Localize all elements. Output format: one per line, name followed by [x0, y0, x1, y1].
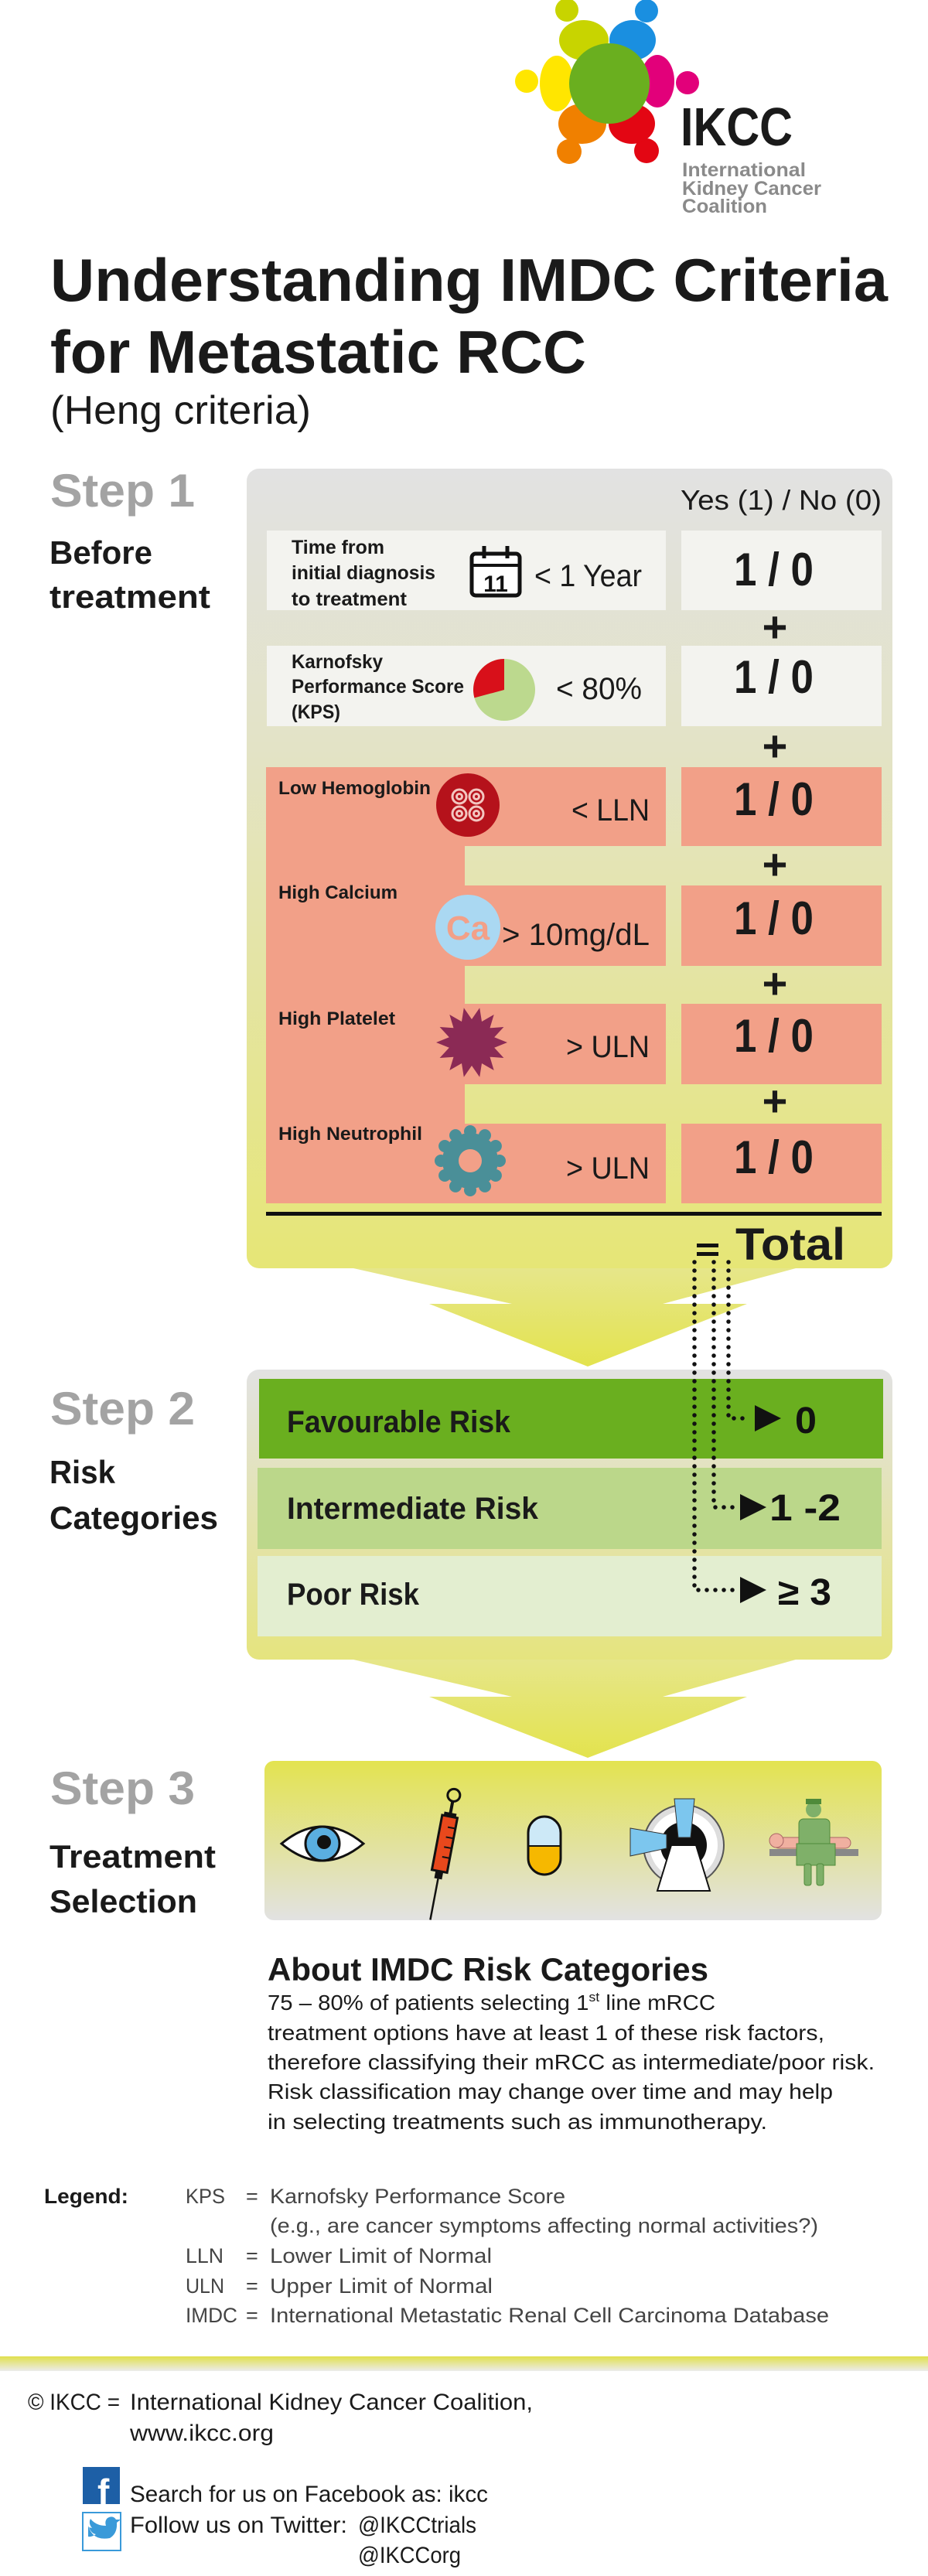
total label — [697, 1220, 845, 1270]
row: time from diagnosis — [267, 531, 882, 610]
icon: calcium — [435, 895, 500, 960]
panel: risk categories — [247, 1370, 892, 1660]
legend: = — [246, 2244, 258, 2267]
text block: about IMDC risk categories: therefore classifying their mRCC as intermediate/poor risk. — [268, 2050, 875, 2074]
step 2 label: Risk — [49, 1454, 116, 1490]
legend: Upper Limit of Normal — [270, 2274, 493, 2298]
row: KPS — [267, 646, 882, 726]
favourable risk: 0 — [795, 1401, 817, 1442]
legend: KPS — [186, 2185, 225, 2208]
row: high platelet: 1 / 0 — [734, 1010, 814, 1062]
footer: social media: @IKCCorg — [358, 2543, 461, 2568]
favourable risk: Favourable Risk — [287, 1405, 511, 1439]
legend — [44, 2185, 829, 2327]
step 1 label: Step 1 — [50, 465, 195, 517]
footer: copyright: International Kidney Cancer Coalition, — [130, 2390, 533, 2415]
step 3 label: Treatment — [49, 1838, 216, 1875]
text block: about IMDC risk categories: st — [589, 1990, 599, 2005]
text block: about IMDC risk categories: treatment options have at least 1 of these risk factors, — [268, 2021, 824, 2045]
icon: facebook — [83, 2467, 120, 2512]
poor risk — [258, 1556, 882, 1636]
row: low hemoglobin — [278, 773, 814, 837]
icon: syringe — [423, 1788, 462, 1921]
total label: Total — [735, 1220, 845, 1270]
intermediate risk — [258, 1468, 882, 1549]
row: KPS: Karnofsky — [292, 651, 383, 673]
intermediate risk: 1 -2 — [769, 1488, 841, 1529]
footer: social media: Follow us on Twitter: — [130, 2513, 347, 2538]
legend: Legend: — [44, 2185, 128, 2208]
footer: social media: @IKCCtrials — [358, 2513, 476, 2538]
icon: surgery — [769, 1799, 858, 1885]
icon: platelet — [436, 1008, 507, 1077]
panel: step 1 criteria: + — [763, 1076, 787, 1125]
row: KPS: (KPS) — [292, 701, 340, 723]
icon: pill — [528, 1817, 561, 1875]
text block: about IMDC risk categories: line mRCC — [599, 1991, 715, 2015]
legend: (e.g., are cancer symptoms affecting normal activities?) — [270, 2214, 818, 2237]
legend: Karnofsky Performance Score — [270, 2185, 565, 2208]
panel: step 1 criteria: + — [763, 602, 787, 651]
text block: about IMDC risk categories: in selecting treatments such as immunotherapy. — [268, 2110, 767, 2134]
icon: eye — [281, 1827, 363, 1861]
step 1 label — [49, 465, 210, 615]
text block: about IMDC risk categories: Risk classification may change over time and may help — [268, 2080, 833, 2103]
step 1 label: Before — [49, 534, 152, 571]
row: low hemoglobin: < LLN — [571, 793, 650, 827]
legend: ULN — [186, 2274, 224, 2298]
row: low hemoglobin: 1 / 0 — [734, 773, 814, 825]
row: high neutrophil: > ULN — [566, 1152, 650, 1186]
text block: about IMDC risk categories: About IMDC Risk Categories — [268, 1951, 708, 1987]
footer: copyright: www.ikcc.org — [129, 2421, 274, 2446]
legend: = — [246, 2304, 258, 2327]
title — [50, 246, 889, 433]
row: time from diagnosis: initial diagnosis — [292, 562, 435, 584]
icon: calendar — [472, 546, 520, 597]
header: yes/no: Yes (1) / No (0) — [681, 484, 882, 516]
title: Understanding IMDC Criteria — [50, 246, 889, 314]
row: time from diagnosis: Time from — [292, 537, 384, 558]
icon: pie chart — [473, 659, 535, 721]
logo: IKCC: IKCC — [681, 97, 793, 157]
icon: radiation scanner — [630, 1799, 724, 1891]
favourable risk — [259, 1379, 883, 1459]
title: for Metastatic RCC — [50, 318, 586, 386]
row: time from diagnosis: 1 / 0 — [734, 544, 814, 595]
icon: twitter — [83, 2513, 121, 2550]
row: high neutrophil: 1 / 0 — [734, 1131, 814, 1183]
footer: copyright: © IKCC = — [28, 2390, 120, 2415]
step 3 label: Selection — [49, 1883, 197, 1919]
text block: about IMDC risk categories: 75 – 80% of patients selecting 1 — [268, 1991, 575, 2015]
text block: about IMDC risk categories — [268, 1951, 875, 2134]
legend: = — [246, 2274, 258, 2298]
lab values block — [266, 767, 882, 1203]
icon: neutrophil — [435, 1125, 506, 1196]
legend: LLN — [186, 2244, 223, 2267]
icon: calcium: Ca — [446, 909, 490, 947]
footer: social media — [83, 2467, 488, 2568]
logo: IKCC — [515, 0, 821, 217]
row: KPS: < 80% — [556, 672, 642, 706]
row: high calcium: > 10mg/dL — [502, 918, 650, 952]
logo: IKCC: Coalition — [682, 196, 767, 217]
icon: facebook: f — [97, 2472, 110, 2512]
arrow: step 2 to step 3 — [353, 1660, 796, 1758]
legend: = — [246, 2185, 258, 2208]
poor risk: ≥ 3 — [778, 1572, 831, 1613]
row: time from diagnosis: to treatment — [292, 589, 408, 610]
row: high calcium — [278, 882, 814, 960]
row: high calcium: 1 / 0 — [734, 892, 814, 944]
row: time from diagnosis: < 1 Year — [534, 559, 642, 593]
intermediate risk: Intermediate Risk — [287, 1492, 539, 1526]
step 3 label: Step 3 — [50, 1762, 195, 1814]
row: KPS: 1 / 0 — [734, 651, 814, 703]
logo: IKCC: International — [682, 159, 806, 181]
panel: step 1 criteria: + — [763, 722, 787, 770]
legend: IMDC — [186, 2304, 237, 2327]
panel: step 1 criteria — [247, 469, 892, 1270]
row: high calcium: High Calcium — [278, 882, 397, 903]
poor risk: Poor Risk — [287, 1578, 420, 1612]
row: low hemoglobin: Low Hemoglobin — [278, 778, 431, 799]
footer: copyright — [28, 2390, 533, 2446]
footer: social media: Search for us on Facebook as: ikcc — [130, 2482, 488, 2507]
step 2 label: Step 2 — [50, 1383, 195, 1435]
panel: treatment options — [264, 1761, 882, 1921]
panel: step 1 criteria: + — [763, 959, 787, 1008]
step 2 label: Categories — [49, 1500, 218, 1536]
step 2 label — [49, 1383, 218, 1536]
step 3 label — [49, 1762, 216, 1919]
row: high platelet: > ULN — [566, 1030, 650, 1064]
row: high neutrophil: High Neutrophil — [278, 1124, 422, 1145]
row: KPS: Performance Score — [292, 676, 464, 698]
arrow: step 1 to step 2 — [353, 1268, 796, 1366]
step 1 label: treatment — [49, 578, 210, 615]
legend: International Metastatic Renal Cell Carcinoma Database — [270, 2304, 829, 2327]
row: high neutrophil — [278, 1124, 814, 1196]
logo: IKCC: Kidney Cancer — [682, 178, 821, 200]
legend: Lower Limit of Normal — [270, 2244, 492, 2267]
row: high platelet — [278, 1008, 814, 1077]
row: high platelet: High Platelet — [278, 1008, 395, 1029]
title: (Heng criteria) — [50, 388, 311, 433]
panel: step 1 criteria: + — [763, 840, 787, 889]
icon: hemoglobin — [436, 773, 500, 837]
icon: calendar: 11 — [483, 571, 508, 597]
dotted connectors: total to risk — [694, 1262, 747, 1590]
